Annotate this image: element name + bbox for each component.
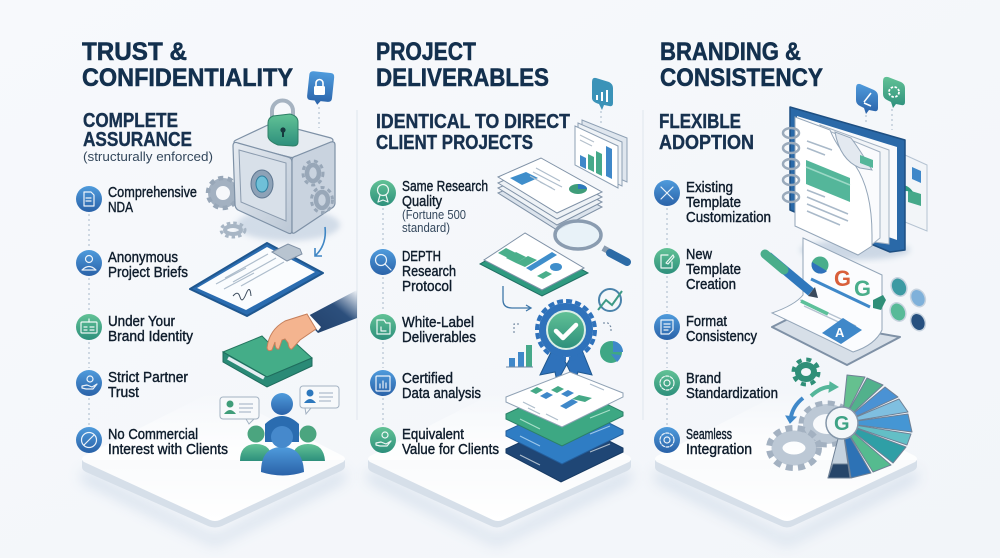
platform base [368, 392, 631, 545]
item: new template creation: New [686, 247, 712, 263]
icon: ring binder [783, 107, 910, 260]
heading [660, 38, 823, 92]
heading: BRANDING & [660, 38, 801, 66]
icon: hand on green folder [223, 290, 357, 387]
icon: green report [480, 233, 588, 296]
icon: colour swatches [887, 275, 928, 333]
item: under your brand identity: Brand Identity [108, 329, 194, 345]
icon: back card with arrow [890, 155, 927, 231]
heading: TRUST & [82, 38, 187, 66]
icon: chart document [575, 120, 627, 188]
item: comprehensive NDA [76, 185, 197, 216]
heading: CONFIDENTIALITY [82, 64, 293, 92]
arrow: safe to clipboard [315, 227, 325, 256]
subheading [83, 110, 213, 164]
item: white-label deliverables [370, 314, 476, 346]
item: format consistency: Format [686, 314, 727, 330]
icon: safe with padlock and gears [208, 100, 340, 241]
arrows: rotation [786, 382, 838, 423]
icon: template tablet and brand sheet: G [834, 266, 851, 291]
item: depth research protocol: Protocol [402, 279, 452, 295]
subheading: ADOPTION [659, 132, 754, 154]
item: existing template customization: Template [686, 195, 741, 211]
item: depth research protocol [370, 249, 456, 295]
subheading: CLIENT PROJECTS [376, 132, 533, 154]
item: anonymous project briefs: Anonymous [108, 250, 178, 266]
arrow: report to badge [503, 286, 531, 311]
item: format consistency [654, 314, 758, 345]
item: existing template customization: Customization [686, 210, 771, 226]
item: under your brand identity: Under Your [108, 314, 175, 330]
icon: certified ribbon badge [537, 301, 595, 382]
item: same research quality: standard) [402, 220, 450, 235]
subheading: ASSURANCE [83, 129, 192, 151]
heading [376, 38, 549, 92]
item: certified data analysis: Data analysis [402, 386, 481, 402]
icon: small bar chart [506, 324, 533, 367]
item: equivalent value: Value for Clients [402, 442, 499, 458]
icon: green gear [794, 360, 818, 384]
platform base [655, 392, 917, 545]
subheading [659, 111, 754, 154]
panel: branding and consistency [654, 38, 928, 545]
item: no commercial interest: Interest with Clients [108, 442, 228, 458]
icon: chart bubble [592, 78, 613, 126]
item: certified data analysis: Certified [402, 371, 453, 387]
item: same research quality: Quality [402, 194, 443, 210]
item: same research quality [370, 179, 488, 235]
subheading: (structurally enforced) [83, 149, 213, 164]
icon: signed clipboard [190, 243, 323, 316]
icon: template tablet and brand sheet: A [835, 325, 845, 340]
item: strict partner trust: Trust [108, 385, 139, 401]
subheading [376, 111, 570, 154]
item: strict partner trust [76, 370, 188, 401]
item: white-label deliverables: Deliverables [402, 330, 476, 346]
icon: brand colour fan [826, 375, 912, 478]
item: comprehensive NDA: Comprehensive [108, 185, 197, 201]
item: seamless integration: Seamless [686, 427, 732, 443]
item: existing template customization [654, 180, 771, 226]
item: format consistency: Consistency [686, 329, 758, 345]
icon: lock bubble [306, 71, 335, 128]
item: no commercial interest [76, 427, 228, 458]
item: brand standardization: Standardization [686, 386, 778, 402]
icon: magnifier [555, 221, 627, 262]
icon: brand colour fan: G [834, 413, 850, 435]
platform base [82, 392, 345, 545]
icon: steel gears [769, 403, 853, 468]
item: existing template customization: Existing [686, 180, 733, 196]
item: comprehensive NDA: NDA [108, 200, 133, 216]
item: anonymous project briefs [76, 250, 188, 281]
item: certified data analysis [370, 370, 481, 402]
item: equivalent value: Equivalent [402, 427, 464, 443]
icon: template tablet and brand sheet [772, 238, 900, 365]
subheading: IDENTICAL TO DIRECT [376, 111, 570, 133]
item: no commercial interest: No Commercial [108, 427, 198, 443]
panel: project deliverables [368, 38, 631, 545]
icon: trend circle [598, 289, 622, 311]
item: seamless integration [654, 427, 752, 458]
item: seamless integration: Integration [686, 442, 752, 458]
item: same research quality: Same Research [402, 179, 488, 195]
item: under your brand identity [76, 314, 194, 345]
icon: template tablet and brand sheet: G [854, 276, 871, 301]
item: depth research protocol: DEPTH [402, 249, 441, 265]
item: new template creation: Creation [686, 277, 736, 293]
item: anonymous project briefs: Project Briefs [108, 265, 188, 281]
item: depth research protocol: Research [402, 264, 456, 280]
icon: pen [765, 254, 818, 298]
icon: layered data stack [506, 372, 623, 482]
item: brand standardization: Brand [686, 371, 721, 387]
icon: pie chart [600, 323, 623, 363]
item: same research quality: (Fortune 500 [402, 207, 466, 222]
heading [82, 38, 293, 92]
item: new template creation [654, 247, 741, 293]
icon: stack of documents [498, 158, 602, 230]
panel: trust and confidentiality [76, 38, 357, 545]
heading: DELIVERABLES [376, 64, 549, 92]
item: new template creation: Template [686, 262, 741, 278]
item: equivalent value [370, 427, 499, 458]
icon: group of people with chat bubbles [220, 386, 339, 476]
item: strict partner trust: Strict Partner [108, 370, 188, 386]
item: white-label deliverables: White-Label [402, 315, 474, 331]
subheading: COMPLETE [83, 110, 178, 132]
icon: edit and settings bubbles [856, 77, 905, 130]
heading: CONSISTENCY [660, 64, 823, 92]
subheading: FLEXIBLE [659, 111, 741, 133]
heading: PROJECT [376, 38, 476, 66]
item: brand standardization [654, 370, 778, 402]
